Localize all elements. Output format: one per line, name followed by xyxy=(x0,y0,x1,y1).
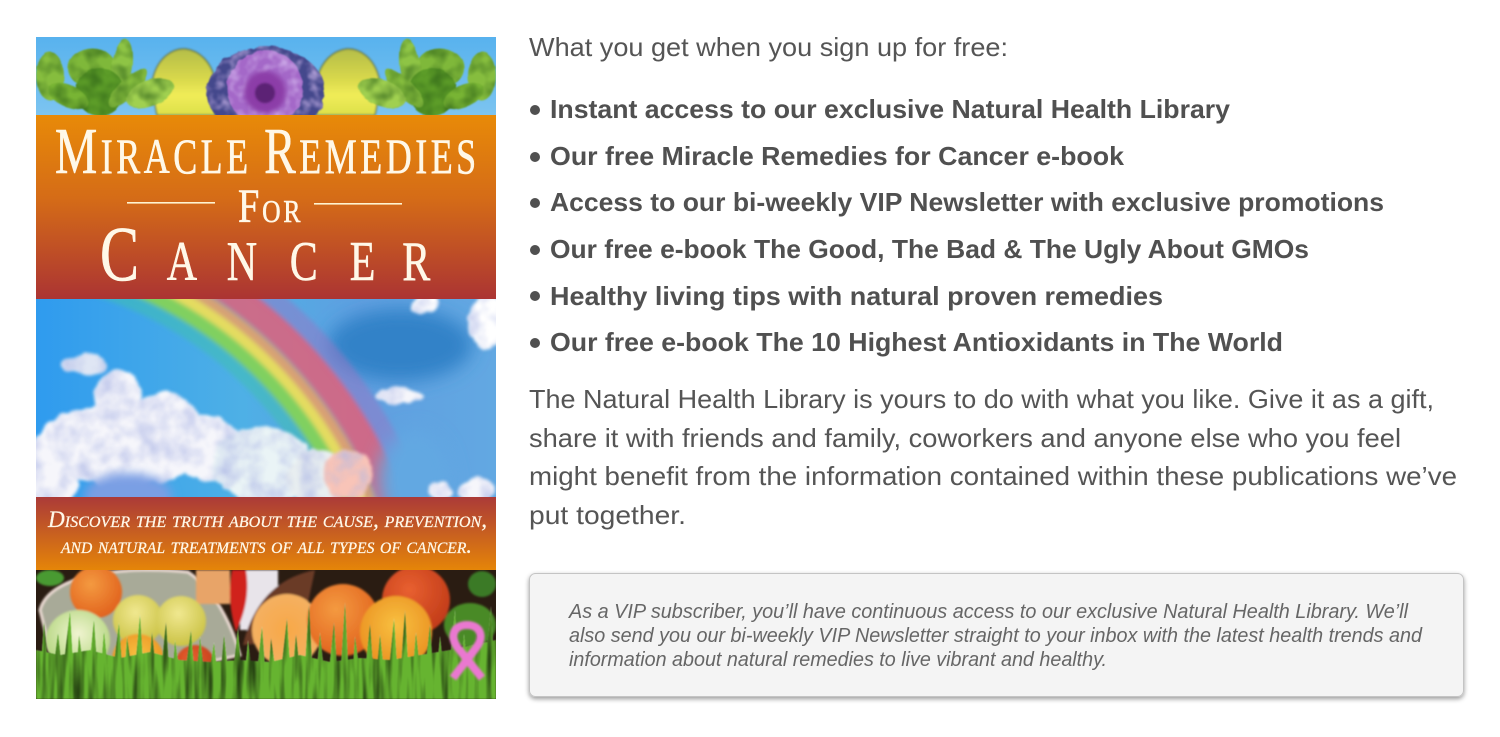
vegetables xyxy=(36,570,496,663)
sky fade at rainbow foot xyxy=(368,436,427,497)
cover top image: vegetables on sky xyxy=(36,37,496,115)
tagline text: and natural treatments of all types of cancer. xyxy=(60,533,472,558)
cover bottom image: vegetables in grass xyxy=(36,566,496,699)
icon: right spinach xyxy=(354,38,496,116)
list item 3: Access to our bi-weekly VIP Newsletter with exclusive promotions xyxy=(550,187,1384,217)
icon: purple cabbage xyxy=(204,44,326,115)
tagline text: Discover the truth about the cause, prevention, xyxy=(47,507,487,532)
dark blue sky patch xyxy=(328,309,472,381)
title: Miracle Remedies: MIRACLE REMEDIES xyxy=(55,116,476,188)
tagline text xyxy=(47,507,487,558)
paragraph: natural health library: put together. xyxy=(529,500,686,530)
list item 2: Our free Miracle Remedies for Cancer e-book xyxy=(550,141,1125,171)
bowl xyxy=(40,570,240,675)
clouds xyxy=(36,299,496,497)
cover rainbow sky image xyxy=(36,299,496,497)
callout: VIP subscriber xyxy=(530,574,1464,696)
icon: left spinach xyxy=(36,38,178,116)
list item 4: Our free e-book The Good, The Bad & The Ugly About GMOs xyxy=(550,234,1309,264)
title band xyxy=(36,115,496,299)
benefits list xyxy=(530,94,1384,357)
callout: VIP subscriber: information about natural remedies to live vibrant and healthy. xyxy=(569,649,1107,671)
rainbow xyxy=(100,299,398,497)
callout: VIP subscriber: As a VIP subscriber, you’ll have continuous access to our exclusive Natural Health Library. We’ll xyxy=(568,601,1409,623)
title: For with rules: FOR xyxy=(238,180,301,233)
paragraph: natural health library xyxy=(529,384,1457,530)
heading: what you get: What you get when you sign up for free: xyxy=(529,32,1008,62)
title: Cancer: C ANCER xyxy=(100,211,430,297)
list item 6: Our free e-book The 10 Highest Antioxidants in The World xyxy=(550,327,1283,357)
list item 1: Instant access to our exclusive Natural Health Library xyxy=(550,94,1231,124)
blue shadow under cloud xyxy=(80,466,176,497)
grass xyxy=(36,602,496,699)
icon: right avocado xyxy=(316,49,379,115)
paragraph: natural health library: might benefit from the information contained within these publications we’ve xyxy=(529,461,1457,491)
icon: left avocado xyxy=(153,49,216,115)
icon: pink ribbon xyxy=(453,625,482,678)
callout: VIP subscriber: also send you our bi-weekly VIP Newsletter straight to your inbox with the latest health trends and xyxy=(569,625,1423,647)
paragraph: natural health library: share it with friends and family, coworkers and anyone else who you feel xyxy=(529,423,1401,453)
list item 5: Healthy living tips with natural proven remedies xyxy=(550,281,1163,311)
paragraph: natural health library: The Natural Health Library is yours to do with what you like. Give it as a gift, xyxy=(529,384,1434,414)
panel: book cover xyxy=(18,37,506,699)
tagline band xyxy=(36,497,496,570)
